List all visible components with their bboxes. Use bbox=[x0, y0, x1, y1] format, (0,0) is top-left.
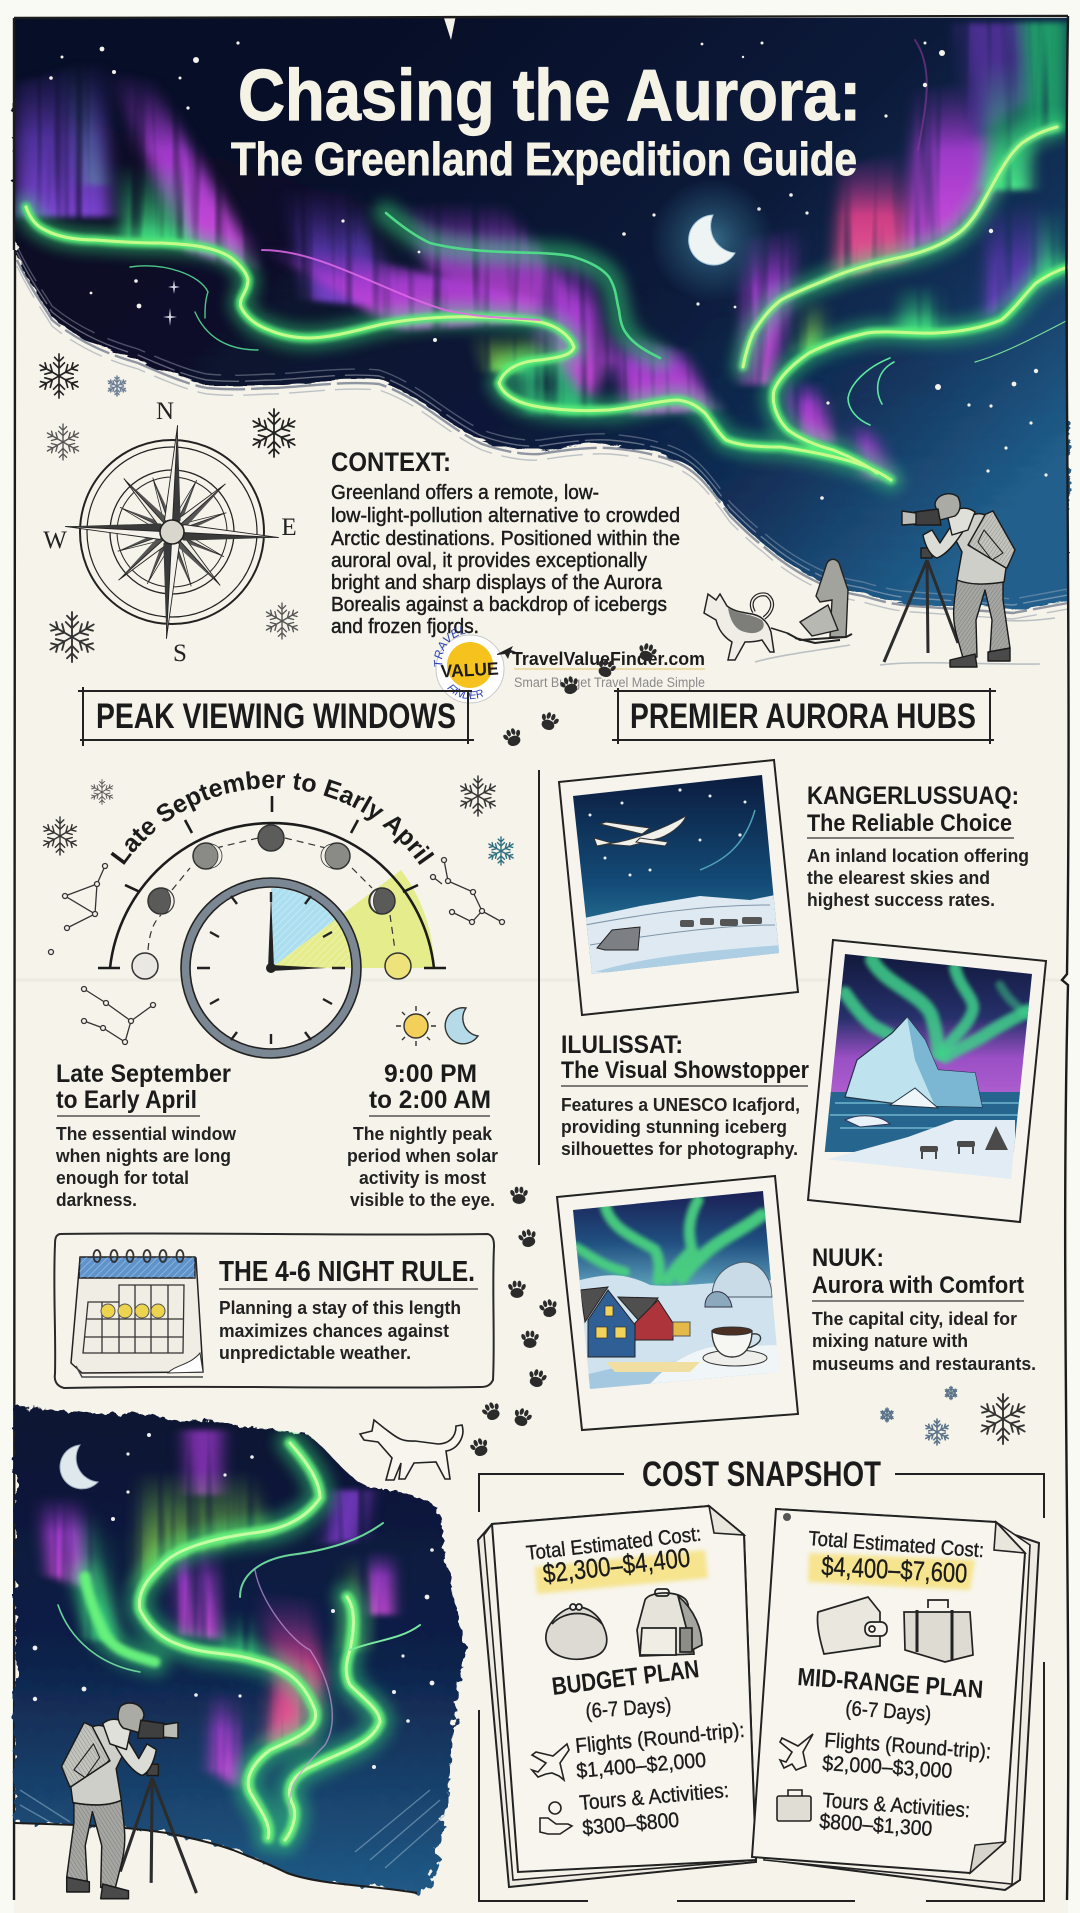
context text block: CONTEXT: bbox=[331, 447, 451, 477]
photographer bbox=[62, 1703, 196, 1899]
hours text: visible to the eye. bbox=[350, 1190, 495, 1210]
budget plan page: $1,400–$2,000 bbox=[575, 1749, 707, 1783]
coffee cup bbox=[703, 1350, 767, 1366]
crescent moon bbox=[60, 1445, 98, 1489]
heading: peak viewing windows bbox=[78, 687, 474, 746]
snowy ground bbox=[15, 1823, 417, 1893]
context text block: auroral oval, it provides exceptionally bbox=[331, 550, 647, 572]
logo: Travel Value Finder: TRAVEL bbox=[434, 626, 466, 667]
icon: compass rose: S bbox=[173, 640, 187, 667]
aurora curtains bbox=[17, 22, 1068, 482]
iceberg bbox=[845, 1017, 982, 1107]
arctic wolf bbox=[360, 1420, 463, 1480]
night sky with aurora bbox=[14, 18, 1068, 619]
season arc bbox=[98, 796, 446, 968]
photographer with tripod (top) bbox=[884, 494, 1015, 667]
hours text: 9:00 PM bbox=[384, 1060, 477, 1088]
aurora ribbons bbox=[58, 1443, 420, 1840]
icon: compass rose: E bbox=[281, 514, 297, 541]
season text: darkness. bbox=[56, 1190, 137, 1210]
sled dogs bbox=[920, 1126, 1008, 1159]
hub: Ilulissat text: providing stunning iceberg bbox=[561, 1117, 787, 1137]
hours text: The nightly peak bbox=[353, 1124, 493, 1144]
budget plan page: Tours & Activities: bbox=[578, 1779, 730, 1815]
season and clock diagram: Late September to Early April bbox=[110, 771, 434, 865]
logo wordmark: TravelValueFinder.com bbox=[512, 649, 705, 669]
snowflakes around arc bbox=[41, 776, 515, 865]
title: Chasing the Aurora: bbox=[238, 56, 861, 136]
heading: peak viewing windows: PEAK VIEWING WINDOWS bbox=[96, 697, 456, 736]
snow marks under sky bbox=[755, 618, 1055, 665]
mid-range plan page: MID-RANGE PLAN bbox=[797, 1663, 984, 1704]
context text block: Borealis against a backdrop of icebergs bbox=[331, 594, 667, 616]
rule description: unpredictable weather. bbox=[219, 1343, 411, 1363]
budget plan page: $2,300–$4,400 bbox=[541, 1542, 692, 1589]
hub: Kangerlussuaq text: The Reliable Choice bbox=[807, 810, 1012, 837]
icon: compass rose: W bbox=[43, 527, 67, 554]
context text block: and frozen fjords. bbox=[331, 616, 479, 638]
icon: compass rose: N bbox=[156, 398, 174, 425]
moon phases bbox=[132, 825, 411, 979]
icon: backpack bbox=[637, 1589, 702, 1656]
hours text bbox=[347, 1060, 498, 1210]
season text bbox=[55, 1060, 237, 1210]
icon: tour hand bbox=[540, 1802, 572, 1834]
icon: sun bbox=[396, 1006, 436, 1046]
hub: Kangerlussuaq text: the elearest skies and bbox=[807, 868, 990, 888]
rule description bbox=[219, 1298, 461, 1363]
season and clock diagram bbox=[98, 771, 446, 1059]
season text: The essential window bbox=[56, 1124, 237, 1144]
mid-range plan page bbox=[752, 1509, 1039, 1890]
polaroid: Nuuk bbox=[557, 1176, 798, 1430]
title bbox=[231, 56, 861, 185]
hub: Nuuk text: mixing nature with bbox=[812, 1331, 968, 1351]
panel: cost snapshot bbox=[478, 1455, 1044, 1901]
hub: Ilulissat text: silhouettes for photography. bbox=[561, 1139, 798, 1159]
aurora ribbons bbox=[26, 40, 1068, 480]
hub: Nuuk text: museums and restaurants. bbox=[812, 1354, 1036, 1374]
hub: Kangerlussuaq text bbox=[807, 782, 1029, 910]
context text block: Greenland offers a remote, low- bbox=[331, 482, 599, 504]
rule heading: THE 4-6 NIGHT RULE. bbox=[219, 1256, 475, 1288]
context text block: low-light-pollution alternative to crowded bbox=[331, 505, 680, 527]
context text block: Arctic destinations. Positioned within the bbox=[331, 528, 680, 550]
hub: Kangerlussuaq text: An inland location offering bbox=[807, 846, 1029, 866]
clock bbox=[181, 878, 361, 1058]
icon: coin purse bbox=[546, 1604, 607, 1659]
crescent moon bbox=[650, 178, 774, 302]
heading: premier aurora hubs bbox=[612, 688, 996, 744]
dog sled with musher bbox=[787, 559, 852, 643]
hub: Nuuk text: Aurora with Comfort bbox=[812, 1272, 1024, 1299]
icon: airplane bbox=[780, 1734, 813, 1770]
hub: Ilulissat text bbox=[561, 1031, 809, 1159]
subtitle: The Greenland Expedition Guide bbox=[231, 133, 857, 185]
igloo bbox=[712, 1262, 772, 1297]
clock hands bbox=[266, 894, 326, 973]
budget plan page bbox=[478, 1506, 756, 1887]
snowflakes lower right bbox=[880, 1386, 1028, 1445]
mid-range plan page: $4,400–$7,600 bbox=[821, 1551, 968, 1589]
icon: suitcase bbox=[904, 1600, 973, 1662]
logo: Travel Value Finder: VALUE bbox=[440, 659, 499, 682]
mid-range plan page: Tours & Activities: bbox=[822, 1789, 971, 1822]
panel: 4-6 night rule bbox=[54, 1233, 494, 1388]
hub: Kangerlussuaq text: highest success rates. bbox=[807, 890, 995, 910]
budget plan page: (6-7 Days) bbox=[585, 1694, 672, 1723]
polaroid: Ilulissat bbox=[808, 940, 1046, 1222]
logo tagline: Smart Budget Travel Made Simple bbox=[514, 675, 705, 690]
heading: premier aurora hubs: PREMIER AURORA HUBS bbox=[630, 697, 976, 736]
logo: Travel Value Finder: FINDER bbox=[447, 684, 484, 700]
hub: Kangerlussuaq text: KANGERLUSSUAQ: bbox=[807, 782, 1019, 810]
hours text: to 2:00 AM bbox=[369, 1086, 491, 1114]
budget plan page: $300–$800 bbox=[581, 1809, 680, 1840]
hub: Ilulissat text: The Visual Showstopper bbox=[561, 1057, 809, 1084]
logo: Travel Value Finder bbox=[434, 626, 705, 704]
budget plan page: BUDGET PLAN bbox=[550, 1655, 701, 1701]
houses bbox=[588, 1290, 635, 1357]
paw print trail bbox=[468, 641, 659, 1459]
stars bbox=[49, 41, 1048, 500]
icon: crescent moon bbox=[445, 1008, 478, 1044]
rule description: Planning a stay of this length bbox=[219, 1298, 461, 1318]
polaroid: Kangerlussuaq bbox=[559, 760, 798, 1015]
husky dog bbox=[704, 594, 787, 660]
constellations bbox=[48, 858, 504, 1044]
budget plan page: Total Estimated Cost: bbox=[525, 1522, 702, 1565]
hub: Nuuk text: The capital city, ideal for bbox=[812, 1309, 1017, 1329]
hub: Ilulissat text: ILULISSAT: bbox=[561, 1031, 683, 1059]
panel: bottom aurora scene bbox=[15, 1400, 470, 1900]
hub: Nuuk text: NUUK: bbox=[812, 1244, 884, 1272]
arc label bbox=[92, 788, 452, 968]
hours text: period when solar bbox=[347, 1146, 498, 1166]
mid-range plan page: $2,000–$3,000 bbox=[822, 1752, 953, 1783]
context text block: bright and sharp displays of the Aurora bbox=[331, 572, 663, 594]
aurora curtains bbox=[40, 1430, 392, 1790]
rule description: maximizes chances against bbox=[219, 1321, 449, 1341]
context text block bbox=[331, 447, 680, 638]
season text: enough for total bbox=[56, 1168, 189, 1188]
yellow wedge bbox=[271, 870, 434, 968]
icon: calendar bbox=[71, 1250, 203, 1377]
snowflakes near compass bbox=[37, 354, 300, 662]
torn paper notch bbox=[443, 15, 456, 40]
icon: airplane bbox=[532, 1744, 569, 1780]
mid-range plan page: Total Estimated Cost: bbox=[808, 1527, 985, 1562]
cost heading: COST SNAPSHOT bbox=[642, 1455, 881, 1494]
icon: wallet bbox=[817, 1597, 887, 1654]
mid-range plan page: Flights (Round-trip): bbox=[824, 1729, 992, 1764]
hours text: activity is most bbox=[359, 1168, 486, 1188]
hub: Nuuk text bbox=[812, 1244, 1036, 1374]
icon: compass rose bbox=[43, 398, 297, 667]
hub: Ilulissat text: Features a UNESCO Icafjord, bbox=[561, 1095, 800, 1115]
budget plan page: Flights (Round-trip): bbox=[574, 1719, 746, 1758]
season text: when nights are long bbox=[55, 1146, 231, 1166]
mid-range plan page: (6-7 Days) bbox=[845, 1697, 932, 1726]
mid-range plan page: $800–$1,300 bbox=[819, 1810, 933, 1841]
icon: briefcase bbox=[777, 1790, 811, 1821]
airplane bbox=[594, 816, 686, 846]
season text: to Early April bbox=[56, 1086, 197, 1114]
season text: Late September bbox=[56, 1060, 231, 1088]
